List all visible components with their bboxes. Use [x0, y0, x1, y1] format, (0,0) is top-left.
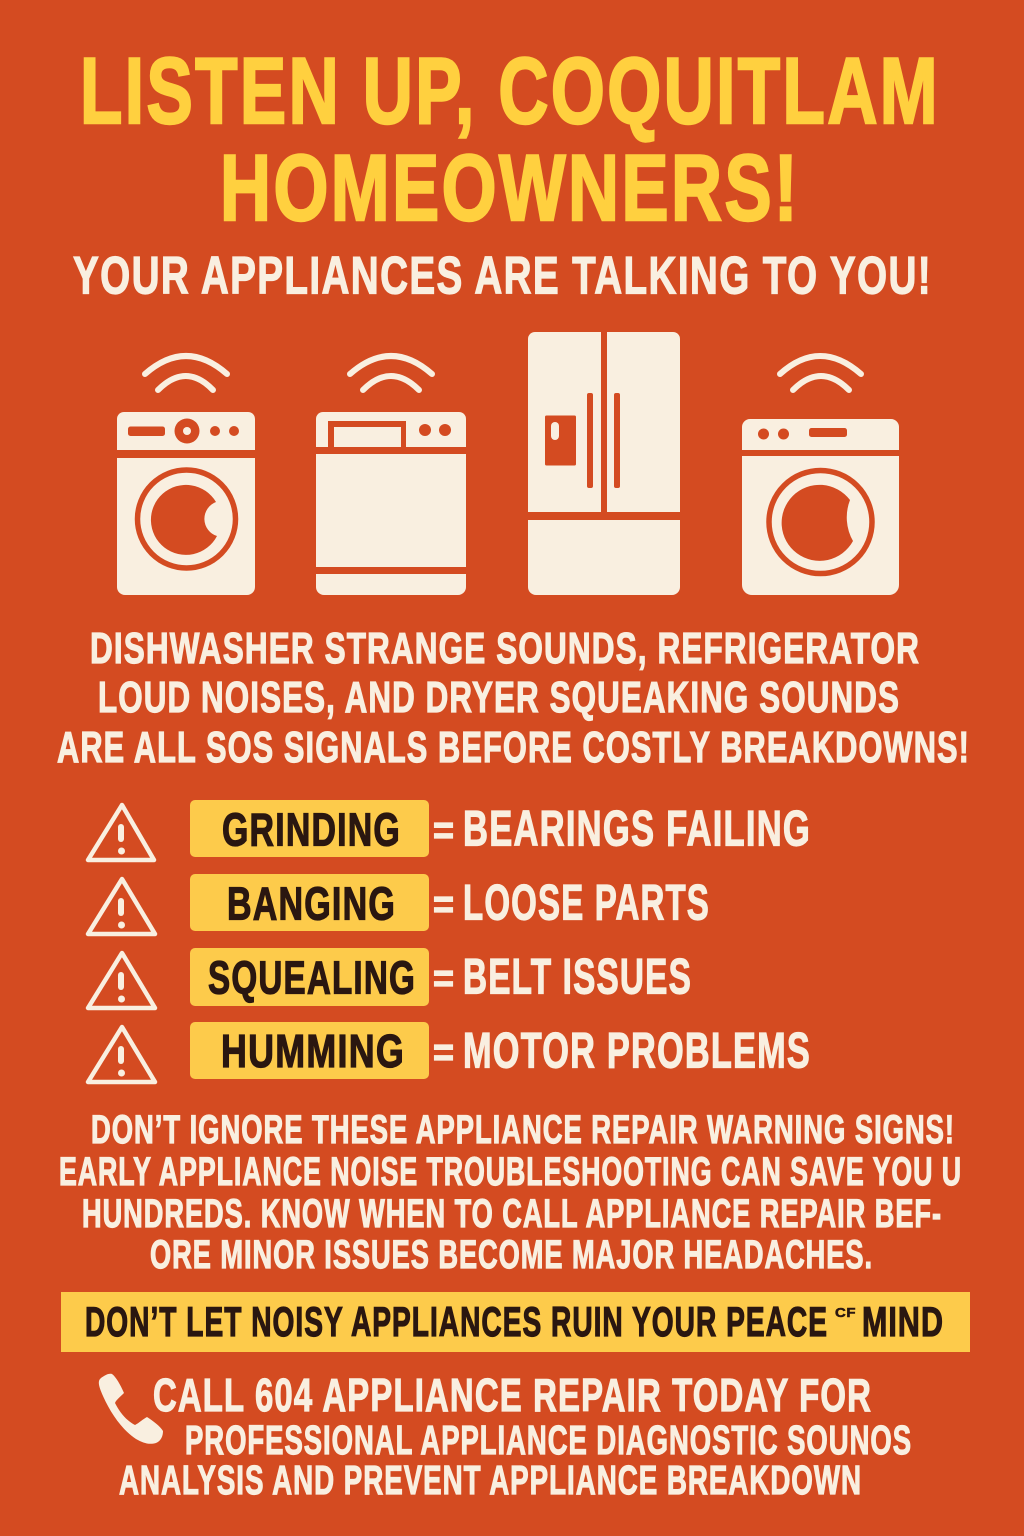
label: grinding [190, 800, 429, 857]
meaning: bearings failing: = [433, 808, 454, 852]
icon: washing machine with sound waves [117, 356, 255, 595]
call to action [119, 1369, 912, 1503]
title [80, 38, 940, 240]
label: squealing [190, 948, 429, 1006]
callout banner: CF [835, 1305, 856, 1320]
icon: warning triangle [88, 1027, 155, 1082]
meaning: bearings failing [433, 800, 811, 856]
label: squealing: SQUEALING [208, 952, 416, 1004]
label: banging: BANGING [227, 878, 396, 930]
advice paragraph [59, 1108, 962, 1277]
title: HOMEOWNERS! [220, 135, 800, 240]
meaning: belt issues [433, 948, 692, 1004]
icon: warning triangle [88, 953, 155, 1008]
icon: dryer with sound waves [742, 356, 899, 595]
icon: phone [99, 1374, 163, 1444]
icon: french door refrigerator [528, 332, 680, 595]
label: grinding: GRINDING [222, 804, 401, 856]
meaning: motor problems: MOTOR PROBLEMS [463, 1022, 811, 1078]
icon: warning triangle [88, 879, 155, 934]
meaning: bearings failing: BEARINGS FAILING [463, 800, 811, 856]
meaning: motor problems: = [433, 1030, 454, 1074]
meaning: loose parts [433, 874, 710, 930]
callout banner: MIND [862, 1298, 944, 1345]
warning row: grinding [88, 800, 811, 860]
icon: dishwasher with sound waves [316, 356, 466, 595]
warning row: squealing [88, 948, 692, 1008]
meaning: loose parts: = [433, 882, 454, 926]
meaning: loose parts: LOOSE PARTS [463, 874, 710, 930]
warning row: banging [88, 874, 710, 934]
label: humming: HUMMING [221, 1025, 405, 1077]
meaning: motor problems [433, 1022, 811, 1078]
warning row: humming [88, 1022, 811, 1082]
intro text [57, 624, 970, 772]
meaning: belt issues: BELT ISSUES [463, 948, 692, 1004]
icon: warning triangle [88, 805, 154, 860]
meaning: belt issues: = [433, 956, 454, 1000]
